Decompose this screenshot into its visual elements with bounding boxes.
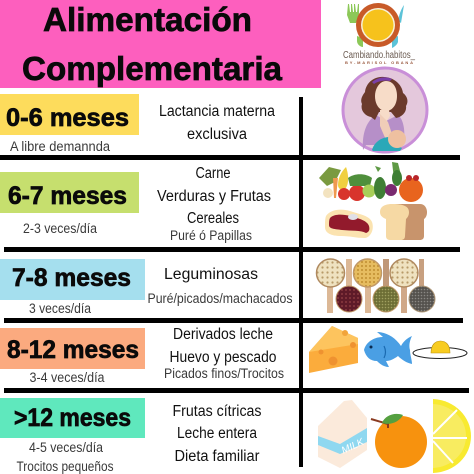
row 2: 6-7 meses: 2-3 veces/día [23,221,97,236]
row 2: 6-7 meses: Carne [196,165,230,182]
row 4: 8-12 meses [0,326,284,385]
row 2: 6-7 meses: Verduras y Frutas [157,188,271,205]
icon: steak [325,210,373,238]
row 4: 8-12 meses: 3-4 veces/día [30,370,105,385]
row 4: 8-12 meses: Picados finos/Trocitos [164,366,284,381]
row 4: 8-12 meses: 8-12 meses [7,336,139,364]
icon: blue fish [364,332,412,367]
icon: breastfeeding mother [343,68,427,152]
icon: cheese [309,326,358,373]
title banner [0,0,321,88]
table grid lines [0,97,469,467]
row 5: more than 12 meses: 4-5 veces/día [29,440,103,455]
icon: milk carton: MILK [340,436,367,457]
title banner: Complementaria [22,50,283,87]
row 5: more than 12 meses: Dieta familiar [174,448,260,465]
row 1: 0-6 meses: Lactancia materna [159,103,275,120]
icon: orange [371,414,427,468]
icon: vegetables and fruit characters [319,162,423,202]
row 2: 6-7 meses: Cereales [187,210,239,227]
row 3: 7-8 meses: 3 veces/día [29,301,91,316]
row 3: 7-8 meses [0,259,293,316]
row 2: 6-7 meses: Puré ó Papillas [170,228,252,243]
icon: bread loaf [380,204,427,240]
row 1: 0-6 meses [0,94,275,154]
row 1: 0-6 meses: exclusiva [187,126,247,143]
row 4: 8-12 meses: Derivados leche [173,326,273,343]
row 1: 0-6 meses: A libre demannda [10,139,110,154]
icon: spoons of legumes [316,259,435,313]
row 5: more than 12 meses: Trocitos pequeños [16,459,114,474]
logo: Cambiando habitos: BY-MARISOL OBANA [345,60,413,65]
row 2: 6-7 meses: 6-7 meses [8,182,127,210]
row 5: more than 12 meses: Frutas cítricas [172,403,262,420]
row 3: 7-8 meses: Puré/picados/machacados [148,291,293,306]
logo: Cambiando habitos: Cambiando.habitos_ [343,50,415,61]
row 3: 7-8 meses: 7-8 meses [12,264,131,292]
icon: lemon slice [433,399,471,473]
row 5: more than 12 meses: >12 meses [14,404,131,432]
row 5: more than 12 meses [0,398,262,474]
row 1: 0-6 meses: 0-6 meses [6,104,129,132]
logo: Cambiando habitos [343,3,415,65]
icon: fried egg [413,341,467,358]
icon: milk carton [318,400,367,468]
row 3: 7-8 meses: Leguminosas [164,266,258,283]
row 5: more than 12 meses: Leche entera [177,425,257,442]
row 2: 6-7 meses [0,165,271,243]
title banner: Alimentación [43,1,252,38]
row 4: 8-12 meses: Huevo y pescado [170,349,276,366]
